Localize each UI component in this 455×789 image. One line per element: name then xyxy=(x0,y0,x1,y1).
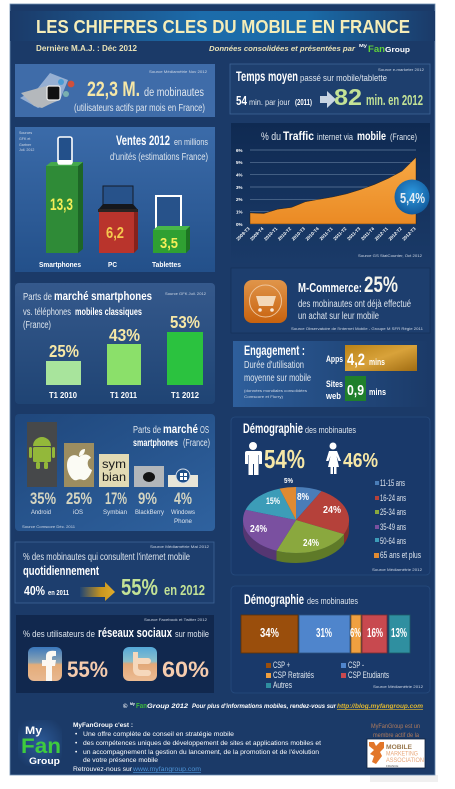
bar: Windows Phone: Windows xyxy=(171,509,196,516)
bar: PC xyxy=(98,186,138,253)
heading: réseaux sociaux xyxy=(98,626,172,640)
description: des mobinautes ont déjà effectué xyxy=(298,299,411,310)
icon: man 54% xyxy=(245,442,305,475)
2011 value: (2011) xyxy=(295,97,312,107)
bar: Symbian: sym xyxy=(102,457,126,471)
panel: mobinautes xyxy=(15,64,215,117)
heading: des mobinautes xyxy=(305,425,356,436)
bar: iOS xyxy=(64,443,94,516)
subtitle: last update: Dernière M.A.J. : Déc 2012 xyxy=(36,44,138,53)
bar: Android xyxy=(27,422,57,516)
bar: T1 2010: T1 2010 xyxy=(49,390,77,400)
pie chart: 24% xyxy=(303,537,320,549)
heading: (France) xyxy=(183,438,210,449)
footer line: My xyxy=(130,702,135,706)
source: Source Médiamétrie Mai 2012 xyxy=(150,545,209,549)
area chart: 2010-T2 xyxy=(277,226,293,242)
bar: smartphones: 13,3 xyxy=(50,195,73,214)
source: Juil. 2012 xyxy=(19,148,34,152)
icon: woman 46% xyxy=(326,442,378,474)
label: de mobinautes xyxy=(144,87,204,99)
source: Source Facebook et Twitter 2012 xyxy=(144,618,207,622)
heading: Parts de xyxy=(133,425,161,436)
description: Durée d'utilisation xyxy=(244,360,304,371)
heading xyxy=(23,552,190,578)
2012 value xyxy=(121,574,205,600)
bar legend: CSP Etudiants xyxy=(348,670,389,681)
area chart: 2009-T4 xyxy=(249,226,265,242)
stacked bar: 6% xyxy=(350,626,361,640)
pie legend: 35-49 ans xyxy=(380,522,406,532)
pie legend: 16-24 ans xyxy=(380,493,406,503)
bar: tablettes xyxy=(153,196,190,253)
logo: MyFanGroup: My xyxy=(25,725,43,737)
footer line: http://blog.myfangroup.com xyxy=(337,703,423,710)
heading: passé sur mobile/tablette xyxy=(300,73,387,84)
source: Source Médiamétrie 2012 xyxy=(372,568,422,572)
heading: Temps moyen xyxy=(236,69,298,84)
subtitle: data by MyFanGroup: My xyxy=(359,43,368,48)
icon: facebook 55% xyxy=(28,647,108,682)
MMA membership note xyxy=(371,724,420,739)
company description: un accompagnement la gestion du lancement, de la promotion et de l'évolution xyxy=(83,749,319,756)
area chart xyxy=(235,148,417,242)
company description: Retrouvez-nous sur xyxy=(73,766,133,773)
description xyxy=(244,360,311,399)
footer line: © xyxy=(123,703,128,710)
company description: MyFanGroup c'est : xyxy=(73,722,133,729)
subtext: (utilisateurs actifs par mois en France) xyxy=(74,103,205,114)
panel: traffic chart xyxy=(231,123,430,263)
heading: % des utilisateurs de xyxy=(23,629,95,640)
2011 value: min. par jour xyxy=(249,97,290,107)
bar: iOS: iOS xyxy=(73,509,84,516)
area chart: 0% xyxy=(236,222,243,227)
source: GFK et xyxy=(19,137,30,141)
heading xyxy=(23,626,209,640)
heading: M-Commerce: xyxy=(298,281,362,295)
bar: T1 2012: 53% xyxy=(170,312,200,332)
bar: iOS: 25% xyxy=(66,490,92,508)
2011 value xyxy=(236,94,312,108)
bar: T1 2011: T1 2011 xyxy=(110,390,137,400)
bar: Symbian: bian xyxy=(102,470,126,484)
panel: ventes 2012 xyxy=(15,127,215,272)
area chart: 2012-T1 xyxy=(374,226,389,242)
heading xyxy=(261,129,417,143)
pie chart: 15% xyxy=(266,496,280,507)
bar legend: Autres xyxy=(273,680,292,691)
heading: OS xyxy=(200,425,209,436)
bar labels: PC xyxy=(108,262,117,269)
area chart: 6% xyxy=(236,148,243,153)
bar: T1 2010 xyxy=(46,341,81,400)
source: Source Comscore Déc. 2011 xyxy=(22,525,75,529)
title banner: LES CHIFFRES CLES DU MOBILE EN FRANCE xyxy=(36,17,410,37)
area chart: 2011-T4 xyxy=(360,226,376,241)
company description: • xyxy=(75,749,78,756)
subtitle: data by MyFanGroup: Données consolidées et présentées par xyxy=(209,44,356,53)
footer line: Group 2012 xyxy=(147,704,189,710)
heading: internet via xyxy=(317,132,354,143)
bar: BlackBerry xyxy=(134,466,165,516)
logo: Mobile Marketing Association: MOBILE xyxy=(386,744,413,751)
stacked bar: 34% xyxy=(260,626,279,640)
icon: facebook 55%: 55% xyxy=(67,657,108,682)
bar: apps: mins xyxy=(369,357,385,368)
description: (données mondiales consolidées xyxy=(244,389,307,393)
subtitle: data by MyFanGroup: Group xyxy=(385,45,410,54)
heading: d'unités (estimations France) xyxy=(110,152,208,163)
area chart: 1% xyxy=(236,210,243,214)
stacked bar xyxy=(241,615,410,653)
heading: Démographie xyxy=(243,421,303,436)
source: Source Observatoire de l'Internet Mobile - Groupe M SFR Régie 2011 xyxy=(291,327,423,331)
bar: PC: 6,2 xyxy=(106,225,124,242)
area chart: 2011-T3 xyxy=(346,226,362,241)
bar: T1 2011 xyxy=(107,325,141,400)
bar: Symbian: Symbian xyxy=(103,509,127,516)
pie legend: 65 ans et plus xyxy=(380,550,421,560)
company description: Une offre complète de conseil en stratégie mobile xyxy=(83,731,234,738)
area chart: 3% xyxy=(236,185,243,190)
heading: sur mobile xyxy=(175,629,209,640)
logo: Mobile Marketing Association: MARKETING xyxy=(386,750,418,758)
source: Source GS StatCounter, Oct 2012 xyxy=(358,254,422,258)
callout: 5,4%: 5,4% xyxy=(400,190,425,207)
source: Sources xyxy=(19,131,32,135)
pie chart: 8% xyxy=(297,492,309,503)
arrow xyxy=(320,91,336,108)
bar: tablettes: 3,5 xyxy=(160,235,178,252)
bar: Windows Phone: 4% xyxy=(174,490,192,508)
title banner xyxy=(10,11,435,41)
description: Comscore et Flurry) xyxy=(244,395,283,399)
bar: Windows Phone: Phone xyxy=(174,518,192,525)
heading xyxy=(298,272,398,297)
heading: mobile xyxy=(357,129,386,143)
area chart: 5% xyxy=(236,160,243,165)
bar: sites web: 0,9 xyxy=(347,382,364,399)
area chart: 2% xyxy=(236,197,243,202)
panel: demographie CSP xyxy=(231,586,430,693)
panel: m-commerce xyxy=(231,268,430,333)
area chart: 2010-T4 xyxy=(305,226,320,242)
pie chart: 24% xyxy=(323,504,342,516)
bar: Windows Phone xyxy=(168,469,198,525)
heading: marché smartphones xyxy=(54,291,152,303)
icon: woman 46%: 46% xyxy=(343,450,378,472)
footer line xyxy=(123,702,423,710)
stacked bar: 16% xyxy=(367,626,383,640)
subtitle: data by MyFanGroup: Fan xyxy=(368,44,385,54)
icon: twitter 60%: 60% xyxy=(162,657,209,682)
bar: Android: 35% xyxy=(30,490,56,508)
company description xyxy=(73,722,321,773)
heading: Traffic xyxy=(283,129,314,143)
icon: hand holding phone xyxy=(20,73,74,108)
2012 value: min. en 2012 xyxy=(366,92,423,109)
heading: % des mobinautes qui consultent l'internet mobile xyxy=(23,552,190,563)
heading xyxy=(236,69,387,84)
company description: des compétences uniques de développement de sites et applications mobiles et xyxy=(83,740,321,747)
area chart: 2012-T3 xyxy=(401,226,417,242)
2011 value: 54 xyxy=(236,94,247,108)
source: Source GFK Juil. 2012 xyxy=(165,292,206,296)
company description: • xyxy=(75,731,78,738)
2012 value xyxy=(334,84,423,110)
heading: quotidiennement xyxy=(23,564,100,578)
bar: T1 2010: 25% xyxy=(49,341,79,361)
bar: apps xyxy=(326,345,417,371)
area chart: 2010-T1 xyxy=(263,226,279,242)
logo: MyFanGroup: Group xyxy=(29,756,61,766)
company description: www.myfangroup.com xyxy=(132,766,201,773)
bar: sites web xyxy=(325,376,386,402)
source: Source e-marketer 2012 xyxy=(378,68,424,72)
heading xyxy=(110,133,208,163)
pie legend: 50-64 ans xyxy=(380,536,406,546)
bar: Symbian: 17% xyxy=(105,490,127,508)
area chart: 2009-T3 xyxy=(235,226,251,242)
bar: apps: Apps xyxy=(326,354,343,365)
area chart: 4% xyxy=(236,172,243,178)
bar: sites web: Sites xyxy=(326,379,343,390)
source: Gartner xyxy=(19,143,32,147)
pie legend: 25-34 ans xyxy=(380,507,406,517)
panel: demographie age xyxy=(231,417,430,575)
bar labels xyxy=(39,262,181,269)
logo: MyFanGroup xyxy=(18,720,62,766)
heading: smartphones xyxy=(133,438,178,449)
heading xyxy=(23,291,152,331)
pie chart: 24% xyxy=(250,523,268,535)
stacked bar: 13% xyxy=(391,626,407,640)
heading: en millions xyxy=(174,137,208,148)
bar legend: CSP + xyxy=(273,660,290,671)
logo: MyFanGroup: Fan xyxy=(21,735,61,758)
bar: smartphones xyxy=(46,137,83,253)
heading: Parts de xyxy=(23,292,52,303)
source: Source Médiamétrie Nov 2012 xyxy=(149,70,207,74)
subtitle: data by MyFanGroup xyxy=(209,43,410,54)
2012 value: 55% xyxy=(121,574,158,600)
logo: Mobile Marketing Association: FRANCE xyxy=(386,764,398,768)
area chart: 2011-T1 xyxy=(318,226,334,241)
panel: internet quotidien xyxy=(15,542,214,603)
icon: man 54%: 54% xyxy=(264,444,305,474)
heading: % du xyxy=(261,131,281,143)
bar: T1 2012: T1 2012 xyxy=(171,390,199,400)
bar: BlackBerry: BlackBerry xyxy=(135,509,165,516)
bar labels: Smartphones xyxy=(39,262,81,269)
headline number: 22,3 M. xyxy=(87,78,140,101)
bar: Android: Android xyxy=(31,509,51,516)
bar legend: CSP Retraités xyxy=(273,670,314,681)
logo: Mobile Marketing Association: ASSOCIATION xyxy=(386,757,424,764)
heading: Ventes 2012 xyxy=(116,133,170,148)
bar: T1 2012 xyxy=(167,312,203,400)
description: un achat sur leur mobile xyxy=(298,311,379,322)
bar: T1 2011: 43% xyxy=(109,325,140,345)
bar labels: Tablettes xyxy=(152,262,181,269)
icon: shopping cart xyxy=(244,280,287,323)
stacked bar: 31% xyxy=(316,626,332,640)
pie legend xyxy=(374,478,421,560)
pie chart xyxy=(243,476,349,563)
area chart: 2012-T2 xyxy=(388,226,403,242)
heading: Engagement : xyxy=(244,343,305,358)
bar: sites web: mins xyxy=(369,387,386,398)
heading: (France) xyxy=(390,132,417,143)
panel: temps moyen xyxy=(230,64,430,114)
arrow xyxy=(80,582,115,601)
company description: de votre présence mobile xyxy=(83,757,158,764)
heading: Démographie xyxy=(244,592,304,607)
pie chart: 5% xyxy=(284,476,293,485)
bar: apps: 4,2 xyxy=(347,350,365,369)
callout: 5,4% xyxy=(394,180,430,214)
heading: vs. téléphones xyxy=(23,307,71,318)
description xyxy=(298,299,411,322)
pie legend: 11-15 ans xyxy=(380,478,405,488)
panel: smartphones market share xyxy=(15,283,215,404)
MMA membership note: membre actif de la xyxy=(373,733,420,739)
company description: • xyxy=(75,740,78,747)
heading: des mobinautes xyxy=(307,596,358,607)
2011 value: en 2011 xyxy=(48,590,69,597)
footer line: Pour plus d'informations mobiles, rendez-vous sur xyxy=(192,704,337,710)
heading: marché xyxy=(163,424,198,436)
logo: Mobile Marketing Association xyxy=(367,739,425,768)
footer line: Fan xyxy=(136,703,147,710)
area chart: 2011-T2 xyxy=(332,226,348,241)
panel: engagement xyxy=(233,341,430,407)
panel: réseaux sociaux xyxy=(16,615,214,693)
2011 value xyxy=(24,584,69,598)
bar: sites web: web xyxy=(325,391,341,402)
bar legend: CSP - xyxy=(348,660,364,671)
source xyxy=(19,131,34,152)
heading: mobiles classiques xyxy=(75,307,142,318)
bar: BlackBerry: 9% xyxy=(138,490,157,508)
2011 value: 40% xyxy=(24,584,45,598)
bar: Symbian xyxy=(99,454,129,516)
2012 value: en 2012 xyxy=(164,582,205,599)
bar legend xyxy=(266,660,389,691)
source: Source Médiamétrie 2012 xyxy=(373,685,423,689)
area chart: 2010-T3 xyxy=(291,226,306,242)
panel: OS market share xyxy=(15,414,215,531)
heading: 25% xyxy=(364,272,398,297)
heading xyxy=(133,424,210,449)
icon: twitter 60% xyxy=(123,647,209,682)
2012 value: 82 xyxy=(334,84,362,110)
heading: (France) xyxy=(23,320,51,331)
description: moyenne sur mobile xyxy=(244,373,311,384)
MMA membership note: MyFanGroup est un xyxy=(371,724,420,730)
